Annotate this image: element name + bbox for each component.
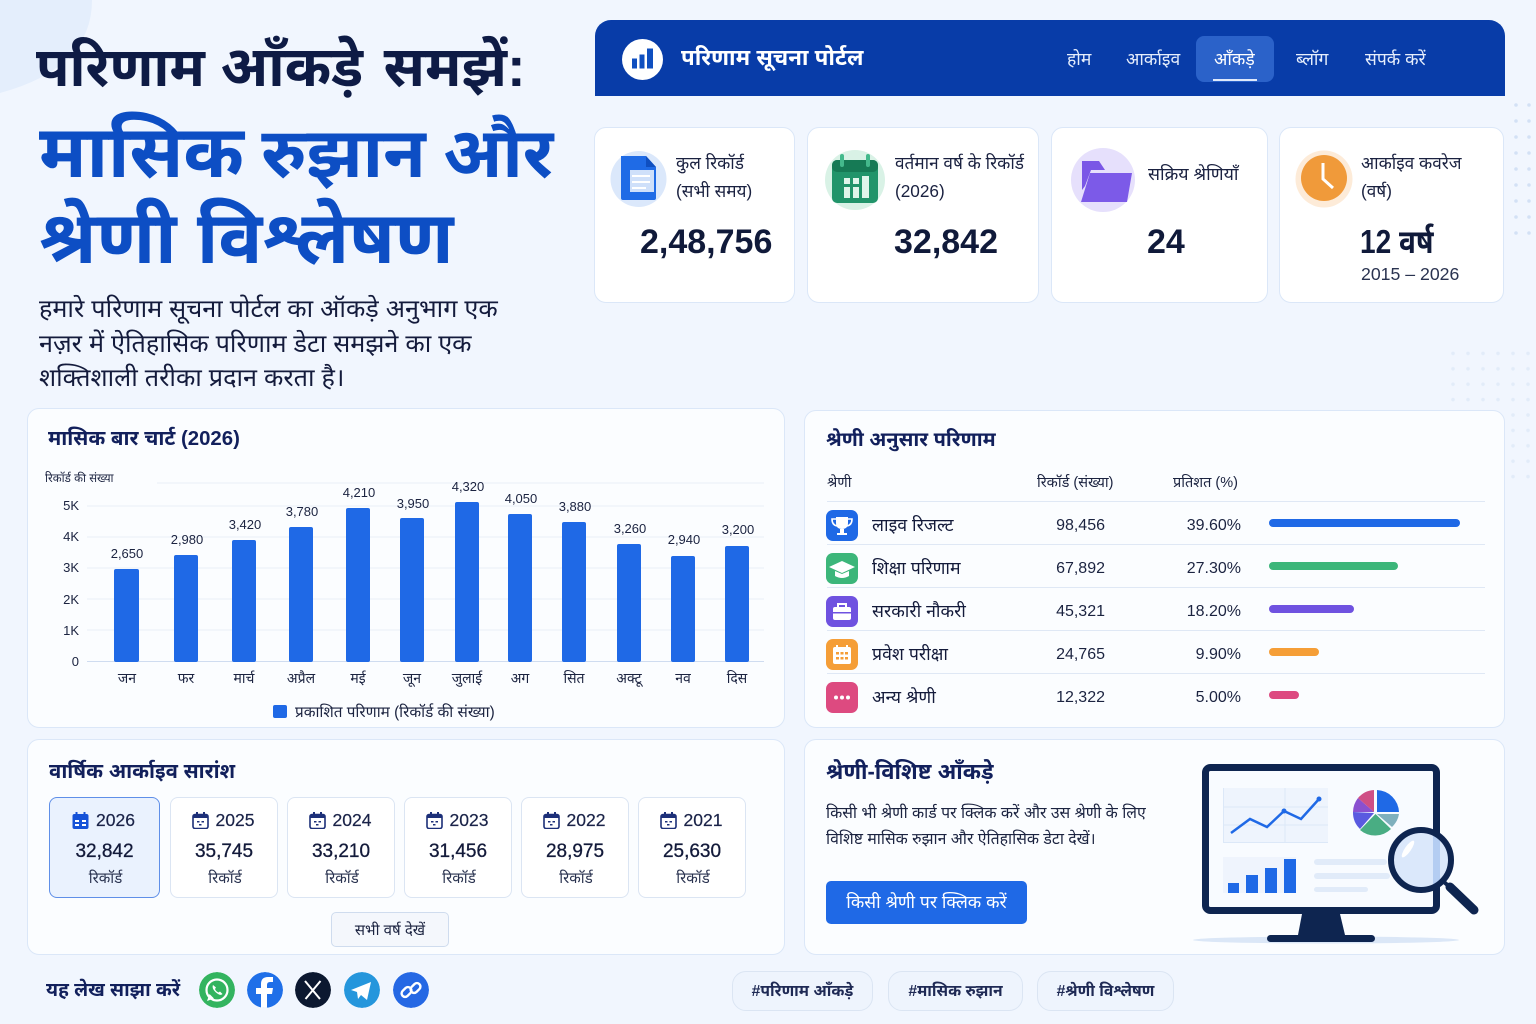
icon: graduation cap [826, 553, 858, 584]
bar chart: 4K [63, 529, 79, 544]
label: कुल रिकॉर्ड [676, 153, 744, 173]
tag: category analysis [1037, 971, 1174, 1011]
bar chart: 3K [63, 560, 79, 575]
column headers: प्रतिशत (%) [1173, 475, 1238, 491]
year card 2023: 31,456 [429, 841, 487, 862]
year card 2026: रिकॉर्ड [89, 870, 122, 887]
bar chart: मई [350, 670, 367, 686]
view all years button: सभी वर्ष देखें [355, 922, 425, 939]
panel: category results [804, 410, 1505, 728]
panel: yearly archive summary [27, 739, 785, 955]
row: government job: 18.20% [1187, 603, 1241, 620]
bar chart: 5K [63, 498, 79, 513]
year card 2026 [49, 797, 160, 898]
nav data: आँकड़े [1214, 49, 1255, 69]
year card 2026: 2026 [96, 810, 135, 830]
title line 3: श्रेणी विश्लेषण [39, 198, 454, 279]
icon: folder [1071, 148, 1135, 212]
row: entrance exam: प्रवेश परीक्षा [872, 644, 948, 664]
year card 2024: रिकॉर्ड [325, 870, 359, 887]
year card 2021: 25,630 [663, 841, 721, 862]
tag: results data: #परिणाम आँकड़े [752, 983, 853, 1000]
icon: telegram [344, 972, 380, 1008]
bar chart: 4,320 [452, 479, 484, 494]
tag: monthly trend [888, 971, 1023, 1011]
bar chart: प्रकाशित परिणाम (रिकॉर्ड की संख्या) [295, 703, 495, 721]
bar chart: 2,650 [111, 546, 143, 561]
year card 2023 [404, 797, 512, 898]
bar chart: 0 [72, 654, 79, 669]
bar chart: सित [563, 670, 586, 686]
icon: calendar [826, 639, 858, 670]
nav blog: ब्लॉग [1296, 49, 1328, 69]
bar chart: 4,050 [505, 491, 537, 506]
year card 2024 [287, 797, 395, 898]
bar chart: जून [403, 670, 421, 688]
view all years button [331, 912, 449, 947]
row: other: 5.00% [1196, 689, 1241, 706]
year card 2022: रिकॉर्ड [559, 870, 593, 887]
icon: calendar [825, 150, 885, 210]
label: आर्काइव कवरेज [1361, 153, 1462, 173]
bar chart: 2,940 [668, 532, 700, 547]
bar chart: जुलाई [452, 670, 483, 688]
description [826, 804, 1146, 848]
row: entrance exam [827, 631, 1485, 674]
logo icon [622, 39, 663, 80]
bar chart [45, 471, 764, 721]
bar chart: रिकॉर्ड की संख्या [45, 471, 115, 485]
intro text: शक्तिशाली तरीका प्रदान करता है। [39, 364, 344, 392]
label: (2026) [895, 181, 945, 201]
icon: x [295, 972, 331, 1008]
button: किसी श्रेणी पर क्लिक करें [846, 892, 1007, 912]
nav archive: आर्काइव [1126, 49, 1180, 69]
year card 2022 [521, 797, 629, 898]
panel: category-specific data [804, 739, 1505, 955]
panel heading: श्रेणी-विशिष्ट आँकड़े [826, 759, 994, 784]
column headers: रिकॉर्ड (संख्या) [1037, 475, 1113, 491]
icon: document [610, 151, 666, 207]
year card 2026: 32,842 [75, 841, 134, 862]
year card 2025: रिकॉर्ड [208, 870, 242, 887]
year card 2025: 2025 [216, 810, 254, 830]
row: live result: लाइव रिजल्ट [872, 515, 954, 535]
label: वर्तमान वर्ष के रिकॉर्ड [895, 153, 1024, 173]
chart heading: मासिक बार चार्ट (2026) [48, 428, 240, 450]
bar chart: 2K [63, 592, 79, 607]
icon: facebook [247, 972, 283, 1008]
tag: category analysis: #श्रेणी विश्लेषण [1057, 983, 1154, 1000]
stat card: current year [807, 127, 1039, 303]
year card 2023: रिकॉर्ड [442, 870, 476, 887]
tag: results data [732, 971, 873, 1011]
label [1361, 153, 1462, 201]
label: (वर्ष) [1361, 181, 1392, 201]
icon: whatsapp [199, 972, 235, 1008]
tag: monthly trend: #मासिक रुझान [908, 983, 1003, 1000]
description: विशिष्ट मासिक रुझान और ऐतिहासिक डेटा देखें। [826, 831, 1096, 848]
bar chart: अग [511, 670, 530, 686]
bar chart: मार्च [234, 670, 256, 686]
nav contact: संपर्क करें [1365, 49, 1426, 69]
title line 1: परिणाम आँकड़े समझें: [36, 35, 526, 98]
share label: यह लेख साझा करें [46, 980, 180, 1001]
year card 2022: 2022 [567, 810, 605, 830]
year card 2021: 2021 [684, 810, 722, 830]
bar chart: 3,260 [614, 521, 646, 536]
row: education: 67,892 [1056, 560, 1105, 577]
intro text [39, 294, 498, 392]
bar chart: 3,780 [286, 504, 318, 519]
icon: briefcase [826, 596, 858, 627]
row: government job [827, 588, 1485, 631]
bar chart: 4,210 [343, 485, 375, 500]
row: other: अन्य श्रेणी [872, 687, 936, 707]
bar chart: फर [178, 670, 195, 686]
value: 12 वर्ष [1360, 223, 1434, 260]
year card 2024: 2024 [333, 810, 371, 830]
panel heading: वार्षिक आर्काइव सारांश [49, 761, 235, 783]
row: other [826, 682, 1299, 713]
bar chart: 2,980 [171, 532, 203, 547]
button [826, 881, 1027, 924]
year card 2021: रिकॉर्ड [676, 870, 710, 887]
stat card: active categories [1051, 127, 1268, 303]
intro text: हमारे परिणाम सूचना पोर्टल का ऑकड़े अनुभाग एक [39, 295, 498, 323]
bar chart: 1K [63, 623, 79, 638]
row: other: 12,322 [1056, 689, 1105, 706]
panel: monthly bar chart [27, 408, 785, 728]
row: education: शिक्षा परिणाम [872, 558, 961, 578]
illustration: monitor with magnifier [1193, 764, 1478, 944]
label [676, 153, 752, 201]
label [895, 153, 1024, 201]
year card 2024: 33,210 [312, 841, 370, 862]
row: education: 27.30% [1187, 560, 1241, 577]
dotted decoration [1452, 103, 1531, 478]
icon: trophy [826, 510, 858, 541]
bar chart: 3,880 [559, 499, 591, 514]
bar chart: 3,420 [229, 517, 261, 532]
background decoration [0, 0, 92, 93]
value: 2,48,756 [640, 223, 772, 261]
stat card: archive coverage [1279, 127, 1504, 303]
panel heading: श्रेणी अनुसार परिणाम [826, 429, 996, 451]
label: (सभी समय) [676, 181, 752, 201]
navigation bar [595, 20, 1505, 96]
row: government job: सरकारी नौकरी [872, 601, 966, 621]
column headers: श्रेणी [827, 475, 852, 491]
year card 2025: 35,745 [195, 841, 253, 862]
bar chart: अक्टू [616, 670, 643, 688]
icon: clock [1296, 150, 1352, 208]
portal name: परिणाम सूचना पोर्टल [681, 45, 863, 70]
nav home: होम [1067, 49, 1091, 69]
bar chart: 3,950 [397, 496, 429, 511]
icon: link [393, 972, 429, 1008]
description: किसी भी श्रेणी कार्ड पर क्लिक करें और उस श्रेणी के लिए [826, 805, 1146, 822]
intro text: नज़र में ऐतिहासिक परिणाम डेटा समझने का एक [39, 330, 472, 358]
row: government job: 45,321 [1056, 603, 1105, 620]
row: entrance exam: 9.90% [1196, 646, 1241, 663]
year card 2025 [170, 797, 278, 898]
row: entrance exam: 24,765 [1056, 646, 1105, 663]
title [36, 35, 554, 279]
bar chart: दिस [727, 670, 748, 686]
year range: 2015 – 2026 [1361, 264, 1459, 284]
bar chart: अप्रैल [287, 670, 316, 686]
icon: dots [826, 682, 858, 713]
value: 24 [1147, 223, 1185, 261]
bar chart: जन [118, 670, 136, 686]
bar chart: नव [675, 670, 691, 686]
row: live result: 39.60% [1187, 517, 1241, 534]
year card 2021 [638, 797, 746, 898]
label: सक्रिय श्रेणियाँ [1148, 164, 1239, 184]
column headers [827, 471, 1485, 502]
title line 2: मासिक रुझान और [39, 112, 553, 193]
bar chart: 3,200 [722, 522, 754, 537]
row: live result: 98,456 [1056, 517, 1105, 534]
row: education [827, 545, 1485, 588]
row: live result [827, 502, 1485, 545]
value: 32,842 [894, 223, 998, 261]
year card 2023: 2023 [450, 810, 488, 830]
year card 2022: 28,975 [546, 841, 604, 862]
active tab [1196, 36, 1274, 82]
stat card: total records [594, 127, 795, 303]
